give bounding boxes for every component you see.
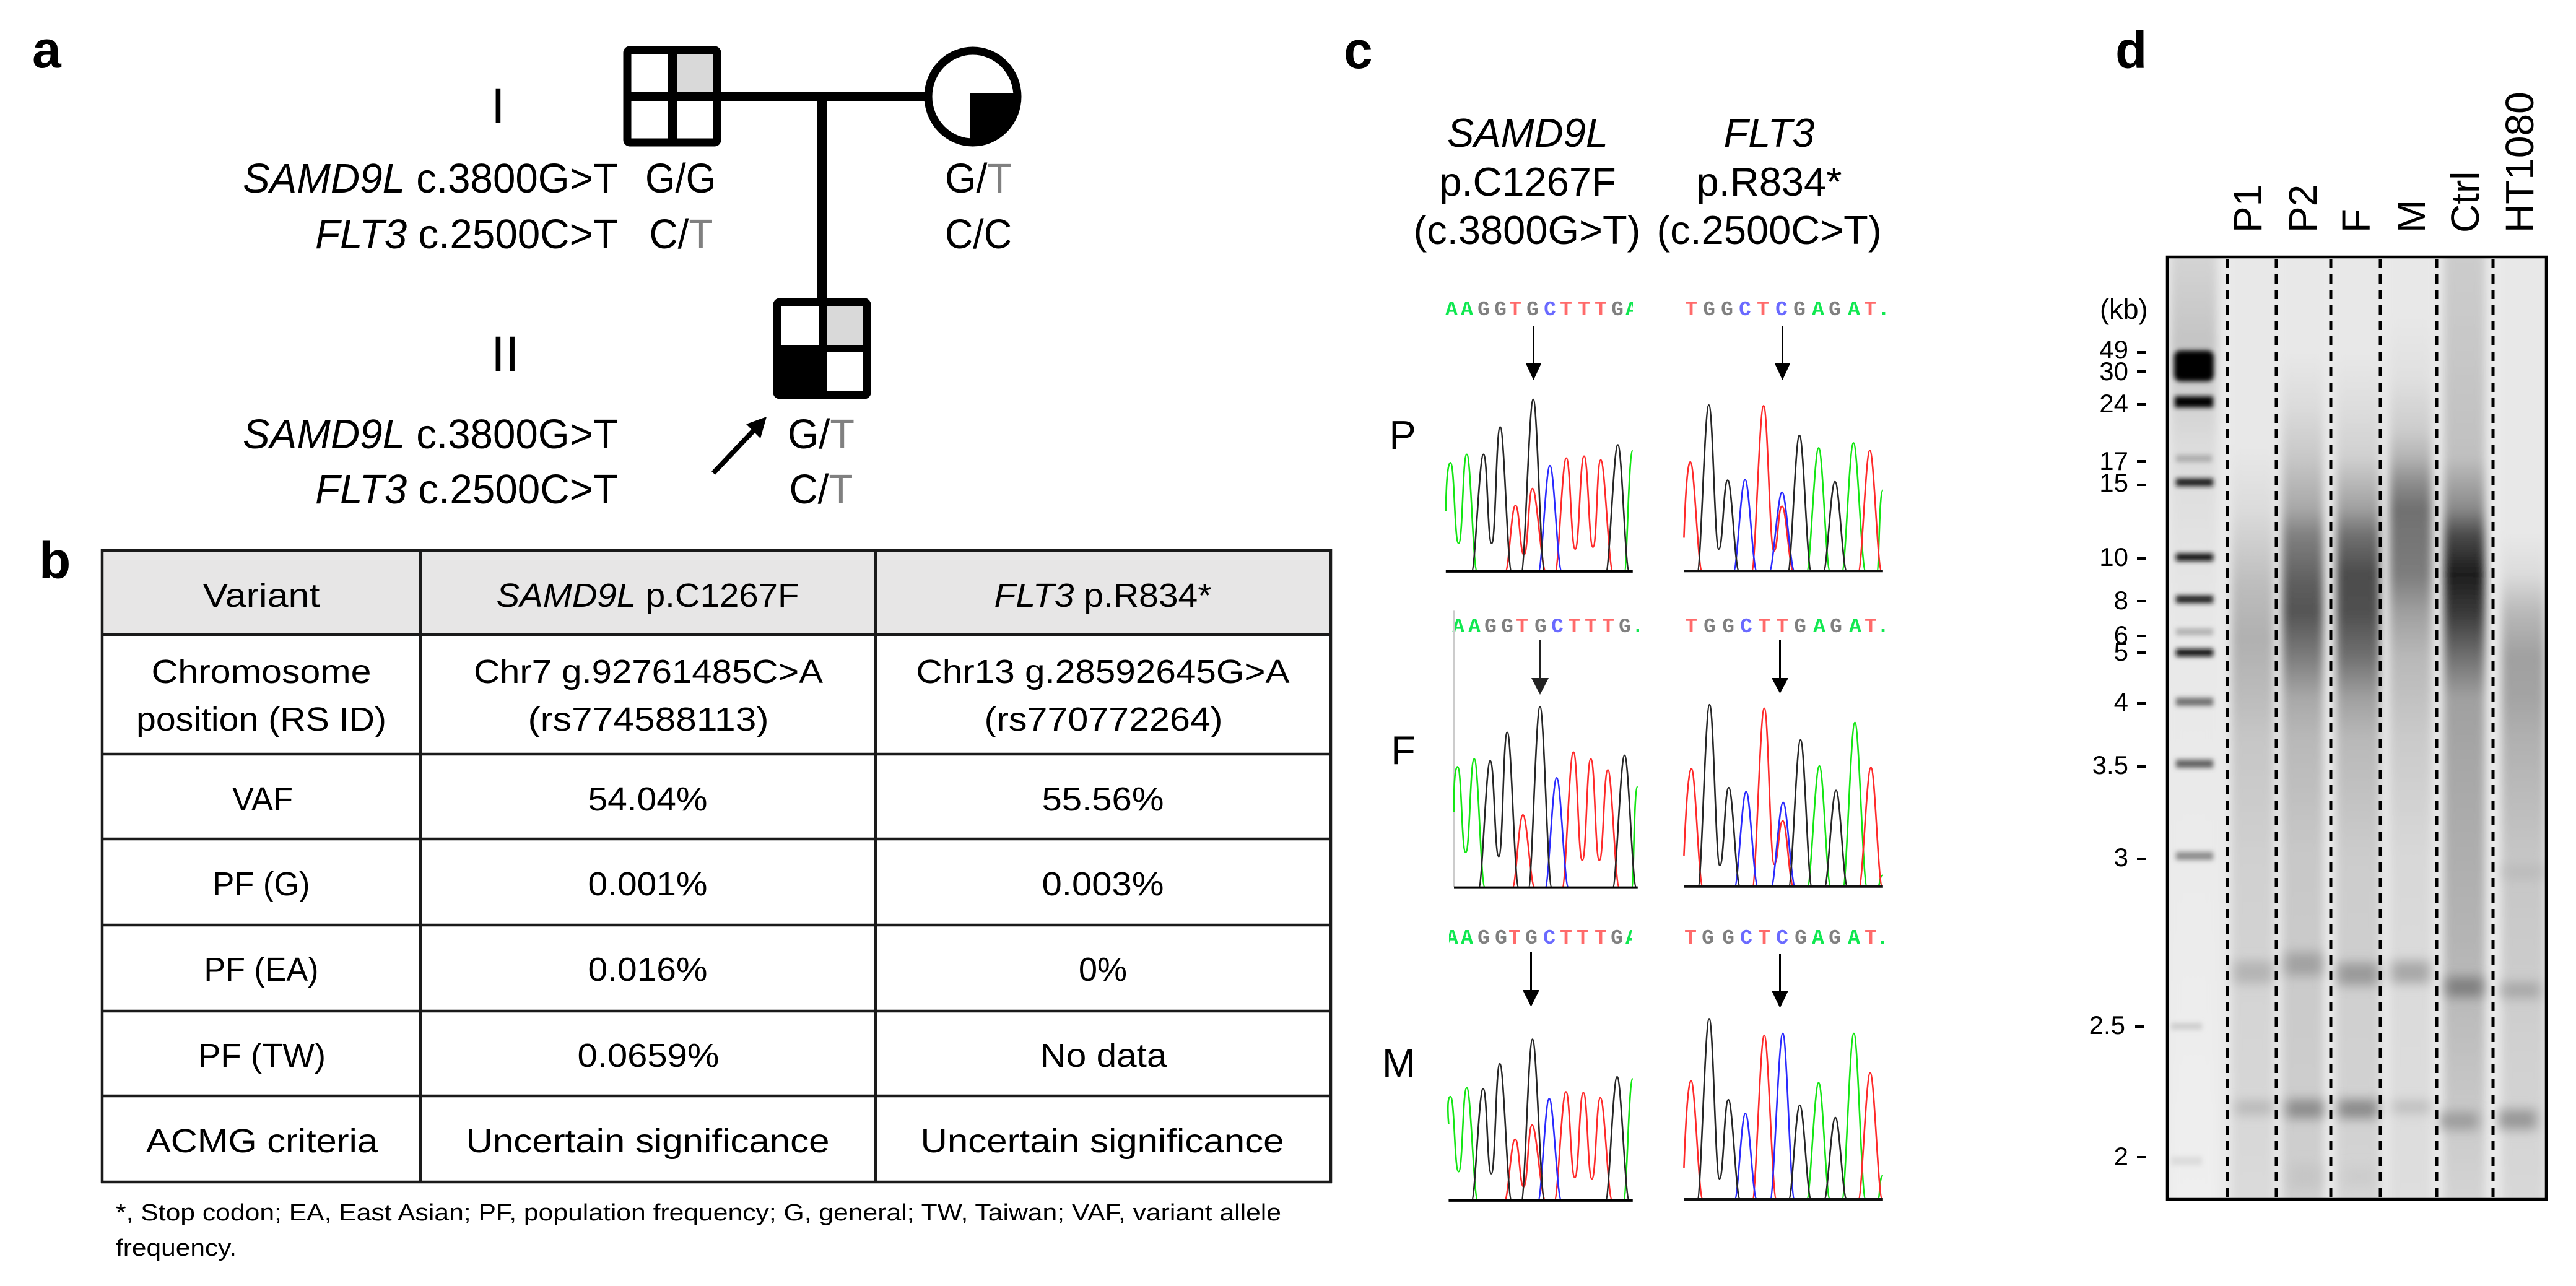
generation label II: II: [491, 326, 520, 383]
table text: 0%: [1079, 951, 1127, 988]
sequence M FLT3: T: [1758, 927, 1770, 950]
sequence P SAMD9L: AA: [1445, 298, 1473, 321]
sequence F FLT3: [1685, 615, 1889, 638]
sequence F FLT3: A: [1849, 615, 1861, 638]
table text: No data: [1040, 1037, 1168, 1074]
table text: PF (G): [213, 866, 310, 903]
lane labels: Ctrl: [2443, 171, 2487, 233]
sequence M FLT3: C: [1740, 927, 1752, 950]
sequence F FLT3: T: [1865, 615, 1877, 638]
marriage line: [718, 92, 929, 101]
lane labels: P2: [2281, 185, 2325, 233]
sequence P FLT3: GG: [1703, 298, 1733, 321]
sequence M FLT3: C: [1776, 927, 1788, 950]
table text: 0.016%: [588, 951, 707, 988]
chromatogram M FLT3: [1684, 1019, 1883, 1199]
sequence F FLT3: G: [1830, 615, 1842, 638]
sequence P SAMD9L: G: [1611, 298, 1624, 321]
panel b: variant table: [39, 531, 1332, 1261]
sequence F SAMD9L: AA: [1452, 615, 1481, 638]
sequence F SAMD9L: G: [1619, 615, 1631, 638]
sequence P FLT3: G: [1829, 298, 1841, 321]
sequence M FLT3: A: [1812, 927, 1824, 950]
genotype labels generation I: G/G: [645, 155, 716, 202]
sequence F SAMD9L: [1452, 619, 1639, 633]
size marker labels: 3.5: [2092, 750, 2128, 780]
size marker labels: 2: [2114, 1142, 2128, 1171]
sequence M FLT3: T: [1865, 927, 1877, 950]
sequence M SAMD9L: C: [1543, 927, 1556, 950]
row label F: F: [1391, 728, 1416, 773]
sequence M SAMD9L: [1449, 930, 1632, 944]
genotype labels generation I: SAMD9L c.3800G>T: [243, 155, 618, 202]
sequence F SAMD9L: TTT: [1568, 615, 1614, 638]
table text: Chromosome: [151, 653, 372, 690]
chromatogram F SAMD9L: [1454, 610, 1638, 888]
lane separators: [2227, 259, 2493, 1199]
symbol: father square: [627, 50, 717, 142]
column header: SAMD9L: SAMD9L: [1447, 110, 1608, 155]
size marker labels: 6: [2114, 620, 2128, 650]
panel label b: b: [39, 531, 71, 589]
size marker labels: 4: [2114, 687, 2128, 716]
column header: SAMD9L: p.C1267F: [1439, 159, 1616, 204]
sequence P FLT3: T: [1864, 298, 1876, 321]
chromatogram P FLT3: [1684, 405, 1883, 571]
lane labels: M: [2389, 200, 2434, 233]
arrow F FLT3: [1772, 640, 1788, 693]
symbol: mother circle: [928, 51, 1017, 142]
table text: Uncertain significance: [466, 1123, 830, 1160]
size unit label: (kb): [2100, 293, 2147, 325]
panel a: pedigree: [32, 20, 1017, 513]
genotype labels generation II: [243, 411, 855, 513]
descent line: [817, 99, 827, 300]
gel image: [2167, 235, 2546, 1226]
genotype labels generation II: C/T: [789, 466, 853, 513]
sequence M SAMD9L: AA: [1446, 927, 1473, 950]
sequence M FLT3: G: [1795, 927, 1807, 950]
sequence P SAMD9L: A: [1625, 298, 1638, 321]
size marker labels: 8: [2114, 586, 2128, 615]
panel label a: a: [32, 20, 62, 79]
table text: [136, 577, 1289, 1160]
panel label d: d: [2115, 21, 2147, 79]
sequence F FLT3: T: [1685, 615, 1697, 638]
table text: 55.56%: [1042, 781, 1164, 818]
table text: position (RS ID): [136, 701, 386, 738]
sequence P SAMD9L: TTT: [1560, 298, 1607, 321]
genotype labels generation I: C/T: [649, 211, 713, 258]
table text: 0.001%: [588, 866, 707, 903]
sequence F SAMD9L: GG: [1484, 615, 1513, 638]
table text: Chr7 g.92761485C>A: [474, 653, 823, 690]
sequence M FLT3: [1684, 927, 1889, 950]
sequence F FLT3: G: [1794, 615, 1806, 638]
sequence P SAMD9L: T: [1509, 298, 1521, 321]
arrow: proband: [713, 417, 767, 473]
sequence M FLT3: T: [1684, 927, 1697, 950]
table text: 54.04%: [588, 781, 707, 818]
sequence M SAMD9L: A: [1625, 927, 1638, 950]
lane labels: P1: [2226, 185, 2270, 233]
table text: PF (TW): [198, 1037, 326, 1074]
table text: Uncertain significance: [920, 1123, 1284, 1160]
panel c: Sanger sequencing: [1344, 21, 1890, 1201]
lane labels: [2226, 92, 2542, 233]
genotype labels generation II: FLT3 c.2500C>T: [315, 466, 618, 513]
sequence P SAMD9L: [1445, 301, 1633, 316]
size marker labels: 17: [2099, 446, 2128, 476]
genotype labels generation I: C/C: [945, 211, 1012, 258]
sequence F FLT3: GG: [1704, 615, 1734, 638]
size marker labels: 24: [2099, 389, 2128, 418]
table text: 0.0659%: [577, 1037, 720, 1074]
sequence P FLT3: C: [1775, 298, 1788, 321]
column header: FLT3: (c.2500C>T): [1656, 207, 1882, 253]
sequence P FLT3: C: [1739, 298, 1751, 321]
genotype labels generation II: G/T: [788, 411, 855, 458]
gel border: [2167, 257, 2546, 1199]
size marker labels: 3: [2114, 843, 2128, 872]
sequence P FLT3: .: [1878, 298, 1890, 321]
sequence P FLT3: A: [1812, 298, 1824, 321]
sequence F FLT3: C: [1740, 615, 1752, 638]
sequence M SAMD9L: T: [1508, 927, 1521, 950]
size marker labels: 49: [2099, 335, 2128, 364]
table text: Chr13 g.28592645G>A: [916, 653, 1289, 690]
arrow M SAMD9L: [1523, 952, 1539, 1007]
size marker labels: 2.5: [2089, 1010, 2125, 1040]
sequence P FLT3: [1685, 298, 1890, 321]
genotype labels generation I: FLT3 c.2500C>T: [315, 211, 618, 258]
sequence P FLT3: G: [1793, 298, 1806, 321]
column header: SAMD9L: (c.3800G>T): [1414, 207, 1640, 253]
column header: SAMD9L: [1414, 110, 1640, 253]
genotype labels generation I: [243, 155, 1012, 258]
row label M: M: [1382, 1040, 1416, 1085]
table text: PF (EA): [204, 951, 318, 988]
chromatogram M SAMD9L: [1448, 1040, 1633, 1201]
arrow P FLT3: [1775, 326, 1791, 380]
panel label c: c: [1344, 21, 1373, 79]
size marker labels: [2089, 335, 2146, 1171]
sequence M FLT3: G: [1829, 927, 1841, 950]
table text: 0.003%: [1042, 866, 1164, 903]
column header: FLT3: [1656, 110, 1882, 253]
arrow F SAMD9L: [1531, 640, 1549, 695]
footnote: frequency.: [116, 1235, 237, 1261]
table header background: [102, 550, 1331, 635]
sequence M FLT3: .: [1876, 927, 1889, 950]
sequence M SAMD9L: G: [1611, 927, 1623, 950]
table text: Variant: [203, 577, 320, 614]
table text: FLT3 p.R834*: [994, 577, 1211, 614]
sequence M FLT3: A: [1848, 927, 1860, 950]
sequence P FLT3: A: [1848, 298, 1860, 321]
sequence M FLT3: GG: [1702, 927, 1734, 950]
table text: (rs774588113): [528, 701, 769, 738]
arrow M FLT3: [1772, 954, 1788, 1008]
sequence M SAMD9L: G: [1525, 927, 1538, 950]
genotype labels generation II: SAMD9L c.3800G>T: [243, 411, 618, 458]
genotype labels generation I: G/T: [945, 155, 1012, 202]
sequence F FLT3: A: [1813, 615, 1825, 638]
generation label I: I: [491, 78, 505, 134]
chromatogram F FLT3: [1684, 705, 1883, 887]
lane labels: HT1080: [2497, 92, 2542, 233]
table text: SAMD9L p.C1267F: [497, 577, 799, 614]
sequence F FLT3: .: [1877, 615, 1889, 638]
table grid: [101, 549, 1332, 1183]
sequence F SAMD9L: T: [1516, 615, 1528, 638]
sequence P SAMD9L: G: [1526, 298, 1539, 321]
sequence F SAMD9L: .: [1632, 615, 1644, 638]
footnote: *, Stop codon; EA, East Asian; PF, population frequency; G, general; TW, Taiwan; VAF, variant allele: [116, 1200, 1281, 1226]
row label P: P: [1389, 412, 1416, 458]
sequence F FLT3: TT: [1758, 615, 1788, 638]
size marker labels: 30: [2099, 357, 2128, 386]
panel d: Southern blot: [2089, 21, 2546, 1226]
size marker labels: 10: [2099, 542, 2128, 571]
column header: FLT3: p.R834*: [1697, 159, 1842, 204]
size marker labels: 5: [2114, 637, 2128, 666]
sequence M SAMD9L: GG: [1477, 927, 1507, 950]
sequence P FLT3: T: [1685, 298, 1697, 321]
size marker labels: 15: [2099, 468, 2128, 497]
sequence P SAMD9L: GG: [1477, 298, 1507, 321]
sequence F SAMD9L: C: [1551, 615, 1564, 638]
column header: FLT3: FLT3: [1724, 110, 1814, 155]
table text: ACMG criteria: [146, 1123, 378, 1160]
arrow P SAMD9L: [1526, 326, 1542, 380]
table text: (rs770772264): [985, 701, 1222, 738]
sequence F SAMD9L: G: [1534, 615, 1547, 638]
sequence P FLT3: T: [1757, 298, 1769, 321]
sequence P SAMD9L: C: [1544, 298, 1556, 321]
lane labels: F: [2334, 209, 2378, 233]
chromatogram P SAMD9L: [1446, 399, 1633, 571]
footnote: [116, 1200, 1281, 1261]
symbol: son square: [777, 302, 867, 395]
sequence M SAMD9L: TTT: [1560, 927, 1607, 950]
table text: VAF: [232, 781, 293, 818]
